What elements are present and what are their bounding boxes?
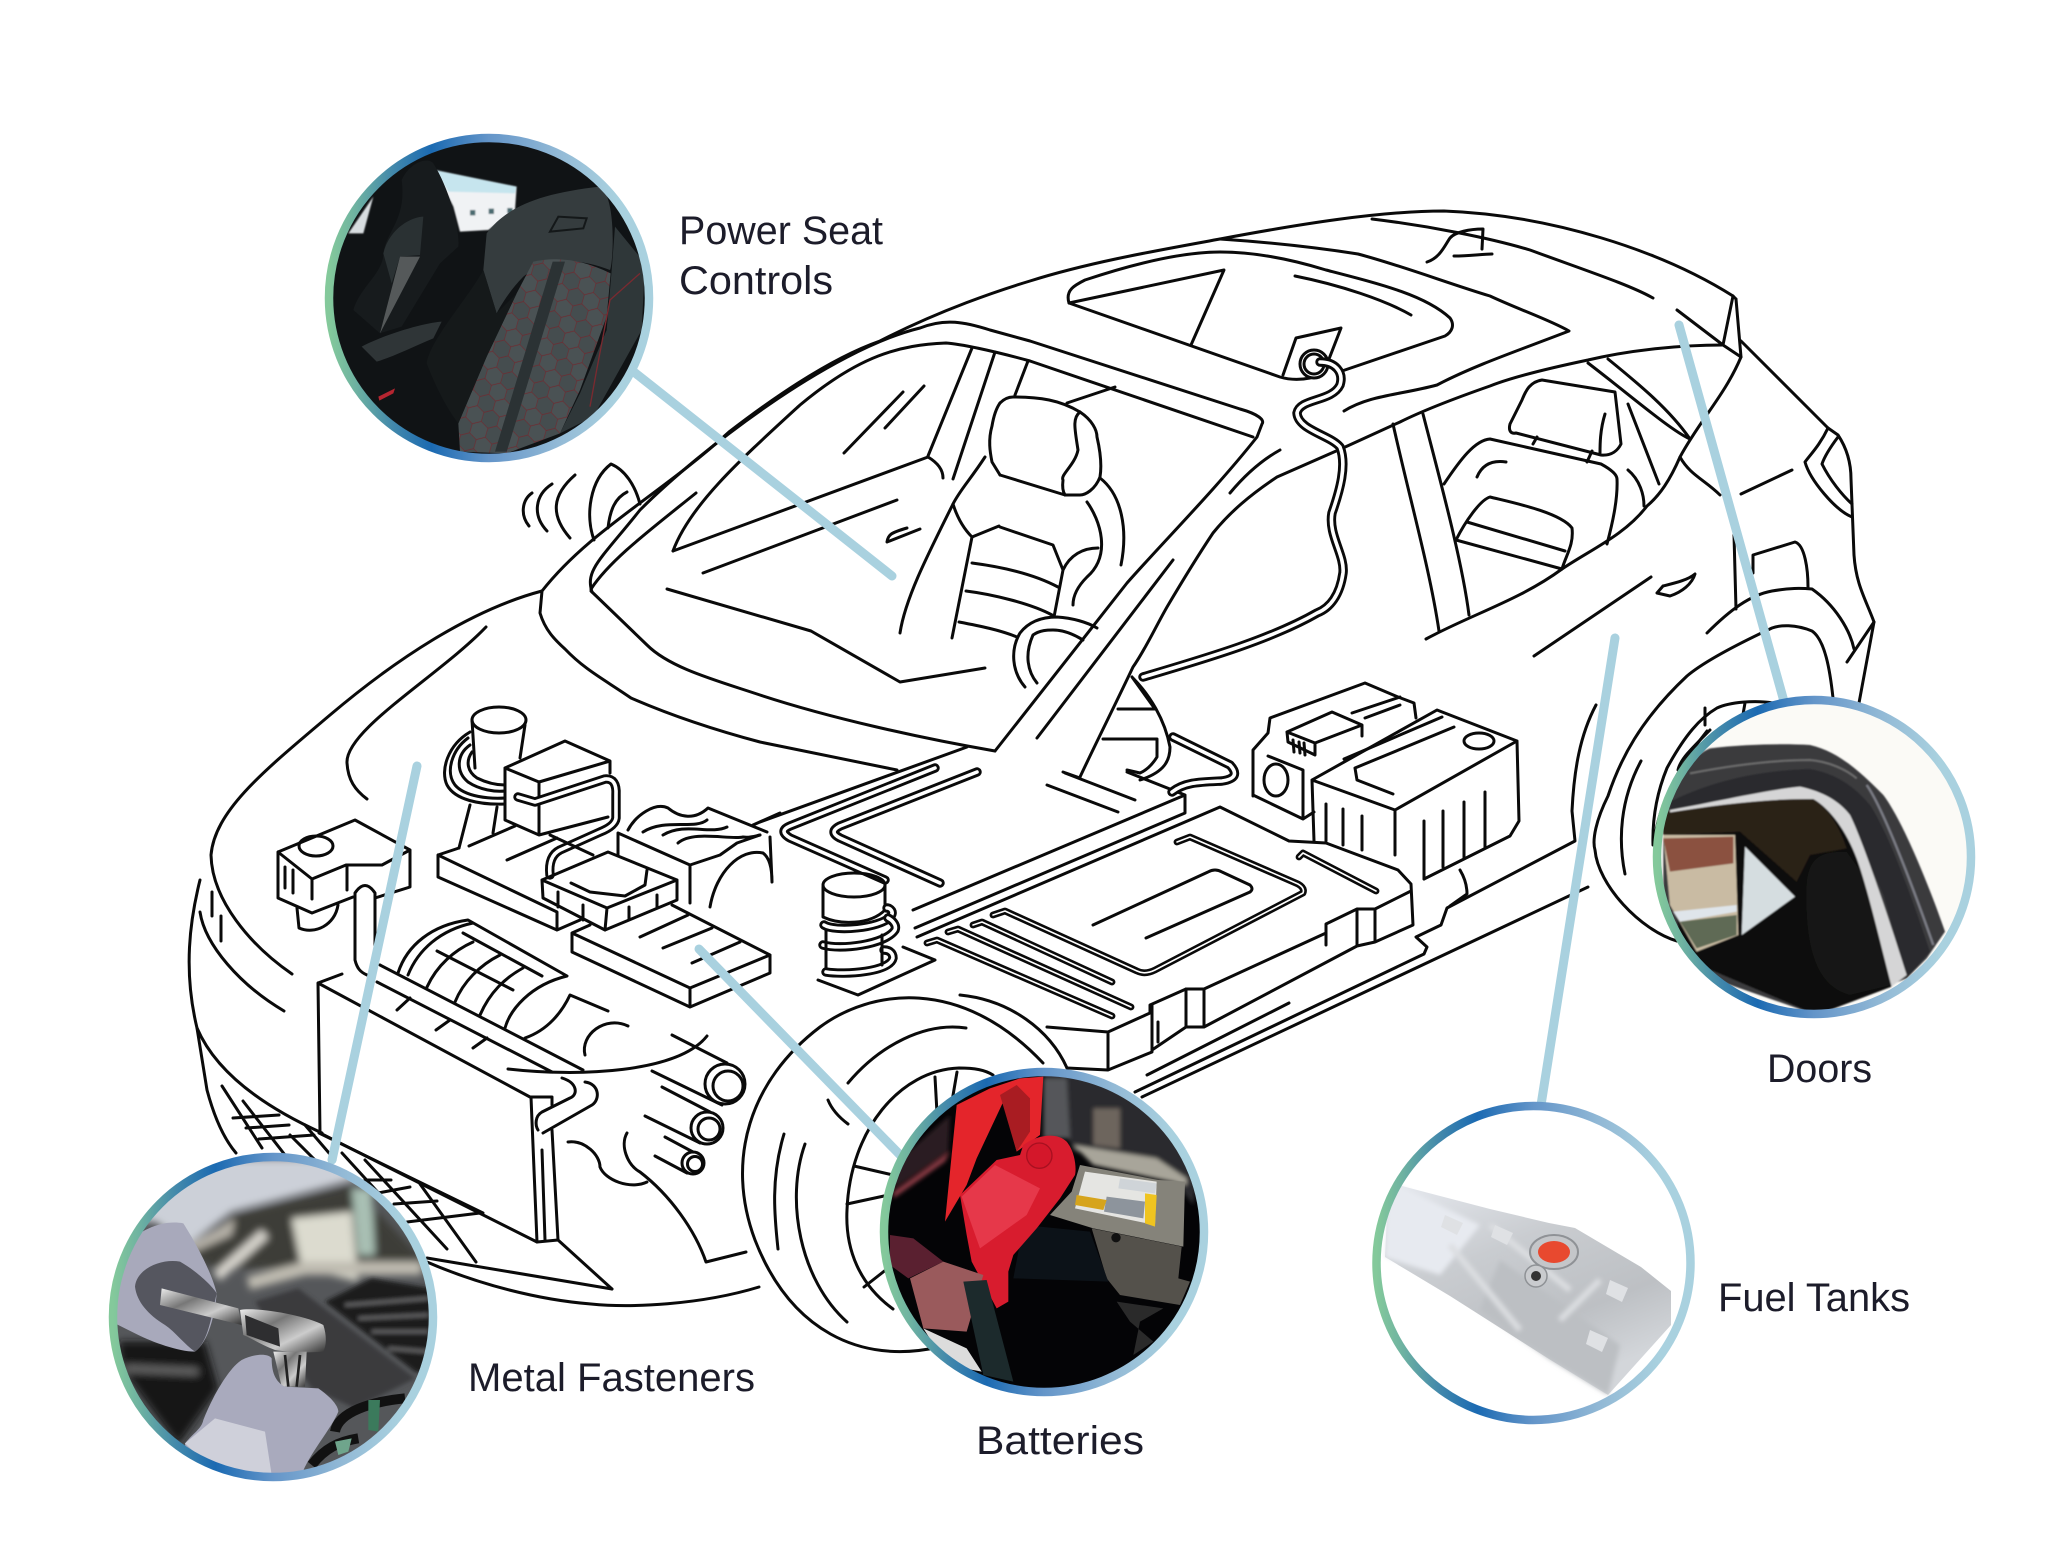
front seat [900,397,1124,638]
leader line: power seat controls [634,372,892,576]
control unit box [542,852,677,930]
steering wheel [1014,617,1097,687]
callout circle: doors photo [1650,695,1990,1035]
label: Batteries: Batteries [976,1419,1144,1463]
leader line: doors [1679,325,1785,705]
strut tower with coil [445,707,526,848]
callout circle: power seat photo [320,130,660,470]
hood and front bumper [189,591,759,1306]
sunroof [1068,252,1452,379]
label: Doors: Doors [1767,1047,1872,1091]
label: Power Seat Controls: Power Seat [679,209,883,253]
car body: roof and outer shell [542,211,1874,777]
underfloor battery tray [913,772,1413,1070]
callout circle: metal fasteners photo [105,1155,445,1495]
front grille mesh [222,1086,483,1262]
callout circle: fuel tank photo [1370,1100,1700,1430]
rear spoiler antenna [1427,229,1492,262]
intake air box [398,920,707,1072]
rear battery module [1253,683,1416,819]
rear seat [1444,380,1621,569]
roof antenna mount [1283,328,1341,378]
label: Fuel Tanks: Fuel Tanks [1718,1276,1910,1320]
front wheel and tyre [743,995,1067,1352]
side mirror with sound waves [523,464,640,540]
label: Metal Fasteners: Metal Fasteners [468,1356,755,1400]
leader line: fuel tanks [1541,638,1615,1105]
label: Power Seat Controls [679,209,883,303]
infographic: car cutaway with part callouts [108,134,1976,1482]
antenna wire [1143,362,1343,677]
car line drawing [189,211,1874,1352]
door details and rear arch [1135,535,1874,1097]
windshield and A pillar [540,322,1280,770]
leader line: metal fasteners [332,766,417,1160]
central floor channels [760,747,977,883]
callout circle: batteries photo [880,1065,1220,1405]
engine pipes [568,1035,746,1262]
leader line: batteries [699,949,905,1160]
radiator [318,965,612,1289]
label: Power Seat Controls: Controls [679,259,833,303]
front strut [818,873,935,995]
12V battery block [572,905,770,1007]
centre tunnel shape and rear loop [1063,677,1234,792]
engine block with wavy cover [618,807,780,907]
engine platform [438,826,593,930]
relay box with cable [505,741,616,875]
rear battery box [1312,710,1519,879]
left reservoir bracket [278,820,410,975]
